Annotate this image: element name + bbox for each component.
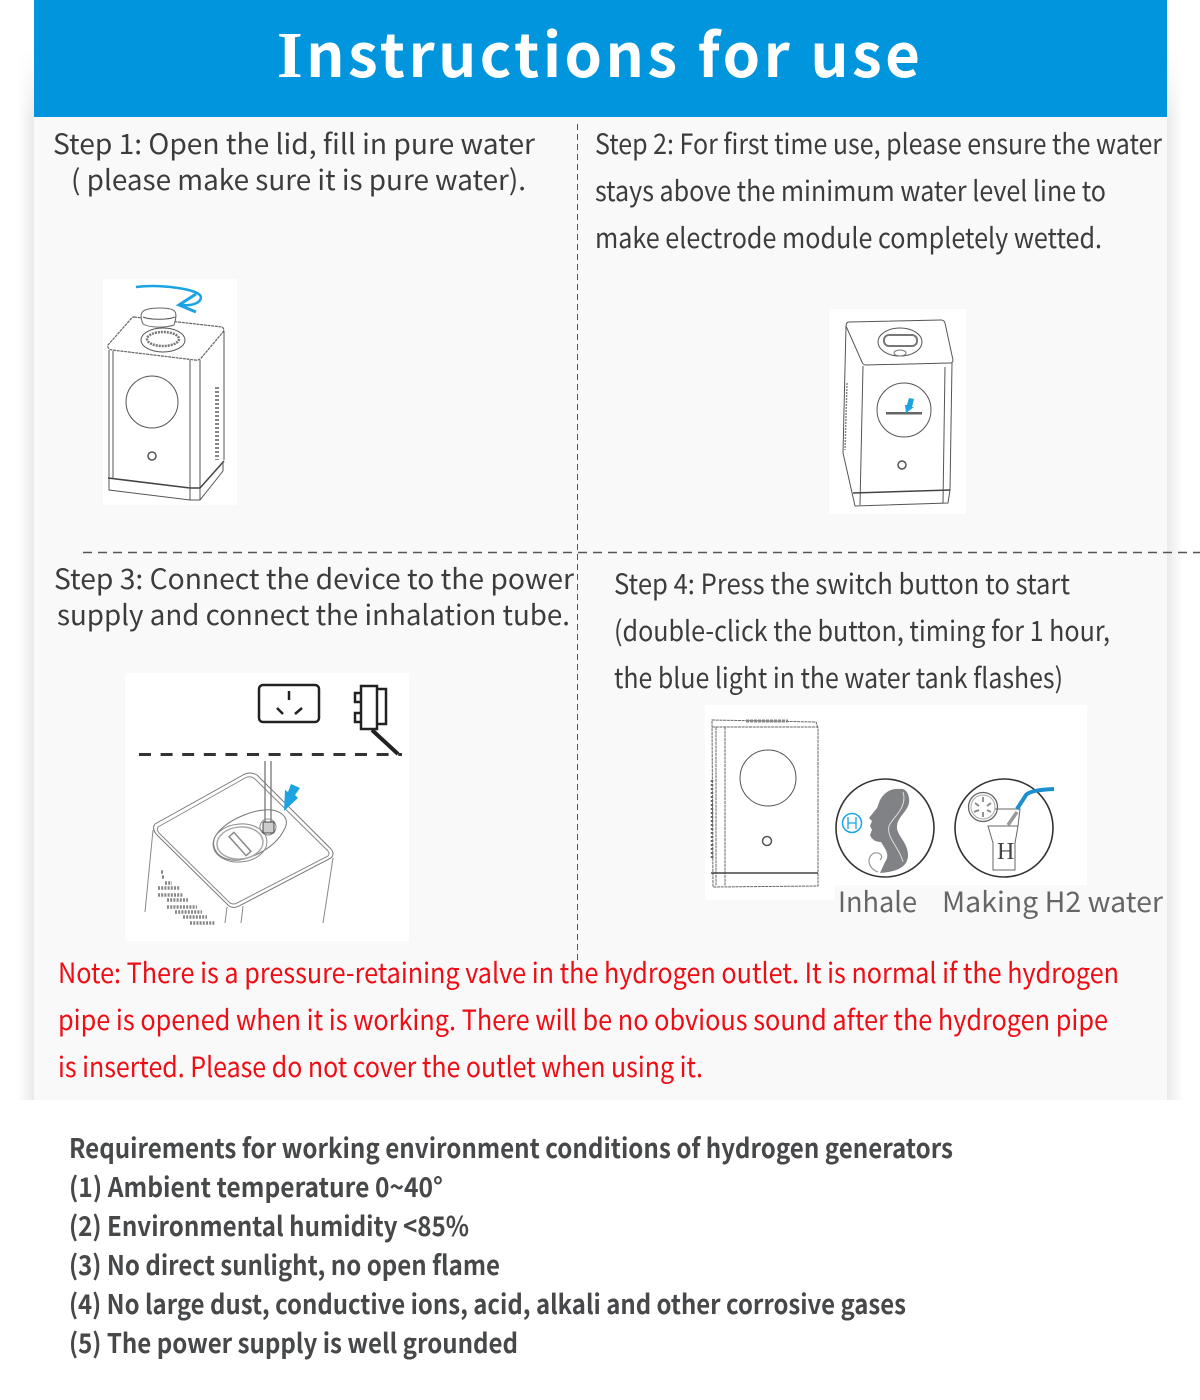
step 1 text: Step 1: Open the lid, fill in pure water <box>53 123 535 163</box>
step 3 text: supply and connect the inhalation tube. <box>57 594 570 634</box>
icon: blue arrow <box>284 784 300 811</box>
step 2 text: make electrode module completely wetted. <box>595 217 1102 257</box>
step 1 text <box>53 123 535 199</box>
device front <box>711 720 818 887</box>
step 4 text: (double-click the button, timing for 1 hour, <box>614 610 1110 650</box>
device top with tube <box>145 761 333 923</box>
icon: making H2 water: H <box>997 839 1014 865</box>
step 3 illustration <box>125 673 409 941</box>
step 2 illustration <box>829 309 966 514</box>
label: Making H2 water: Making H2 water <box>942 881 1163 921</box>
step 4 text <box>614 563 1110 697</box>
note in red: is inserted. Please do not cover the outlet when using it. <box>58 1046 703 1086</box>
requirements list: (3) No direct sunlight, no open flame <box>69 1244 500 1283</box>
icon: making H2 water <box>955 779 1054 877</box>
header banner <box>34 0 1167 117</box>
step 1 text: ( please make sure it is pure water). <box>71 159 526 199</box>
note in red: pipe is opened when it is working. There will be no obvious sound after the hydrogen pipe <box>58 999 1108 1039</box>
icon: power plug <box>355 686 398 754</box>
step 4 illustration <box>705 705 1163 921</box>
title: Instructions for use <box>277 8 920 95</box>
requirements list: Requirements for working environment conditions of hydrogen generators <box>69 1127 953 1166</box>
step 4 text: the blue light in the water tank flashes) <box>614 657 1063 697</box>
step 3 text <box>54 558 574 634</box>
panel: instructions background <box>34 117 1167 1100</box>
requirements list: (5) The power supply is well grounded <box>69 1322 518 1361</box>
step 3 text: Step 3: Connect the device to the power <box>54 558 574 598</box>
requirements list <box>69 1127 953 1361</box>
step 2 text <box>595 123 1162 257</box>
icon: power socket <box>259 685 319 722</box>
step 2 text: stays above the minimum water level line to <box>595 170 1106 210</box>
step 4 text: Step 4: Press the switch button to start <box>614 563 1070 603</box>
step 1 illustration <box>103 279 237 505</box>
note in red <box>58 952 1119 1086</box>
requirements list: (2) Environmental humidity <85% <box>69 1205 469 1244</box>
requirements list: (4) No large dust, conductive ions, acid, alkali and other corrosive gases <box>69 1283 906 1322</box>
label: Inhale: Inhale <box>838 881 917 921</box>
requirements list: (1) Ambient temperature 0~40° <box>69 1166 443 1205</box>
icon: inhale <box>836 779 934 877</box>
